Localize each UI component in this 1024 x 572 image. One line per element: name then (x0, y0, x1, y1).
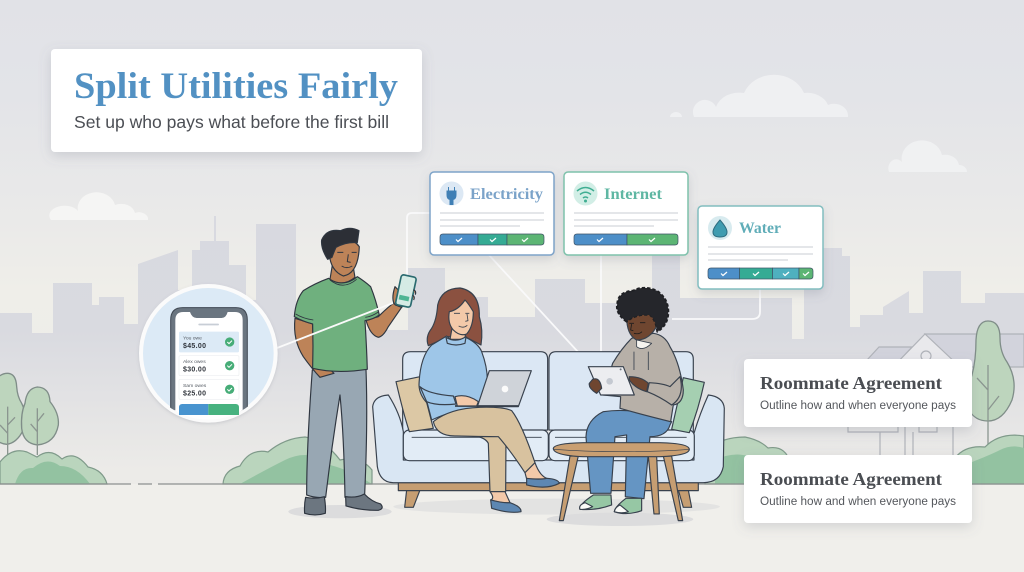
row: you owe (179, 332, 239, 352)
card: roommate agreement 2: Roommate Agreement (760, 469, 942, 489)
hoodie sleeve (647, 377, 681, 405)
internet label: Internet (604, 186, 663, 203)
tablet man hair (617, 288, 668, 332)
woman ankles (490, 463, 548, 503)
shoe soles (580, 503, 628, 513)
woman front leg (433, 407, 535, 473)
bush: right of sofa (705, 437, 790, 484)
callout phone (171, 308, 247, 423)
cloud: right (888, 140, 967, 172)
floor shadows (393, 499, 720, 526)
electricity label: Electricity (470, 186, 543, 203)
woman shoes (491, 478, 559, 512)
hoodie (603, 333, 683, 422)
ground (0, 484, 1024, 572)
cloud: left (49, 192, 148, 220)
sofa and seated people (373, 288, 724, 526)
tree: right (968, 321, 1014, 445)
ground line (0, 483, 1024, 485)
subtitle: Set up who pays what before the first bill (74, 112, 389, 132)
cloud: large (693, 75, 848, 117)
title card panel (51, 49, 422, 152)
tablet man face (629, 323, 645, 334)
bush: middle (223, 437, 372, 484)
row: alex owes (179, 356, 239, 376)
sofa legs (398, 483, 698, 507)
card: electricity (430, 172, 554, 255)
woman sweater (419, 336, 487, 420)
woman face (449, 300, 473, 335)
row: sam owes: $25.00 (183, 390, 206, 397)
card: roommate agreement 1 (744, 359, 972, 427)
trees: left (0, 373, 58, 457)
connector lines (407, 213, 760, 365)
house (848, 334, 1024, 455)
city skyline (0, 216, 1024, 470)
laptop (477, 371, 531, 407)
woman neck (450, 327, 466, 339)
table top (553, 443, 689, 457)
person: man standing with phone (288, 228, 417, 518)
card: roommate agreement 2 (744, 455, 972, 523)
tablet man hands (589, 377, 648, 393)
row: you owe: $45.00 (183, 343, 206, 350)
internet split bar (574, 234, 678, 245)
man hair (322, 228, 359, 259)
title card (51, 49, 422, 152)
bush: far left (0, 451, 107, 484)
woman hand (455, 396, 478, 406)
card: roommate agreement 2: Outline how and when everyone pays (760, 496, 956, 508)
man face (337, 252, 357, 268)
woman hair (427, 288, 482, 346)
phone callout (141, 286, 276, 423)
card: internet (564, 172, 688, 255)
pillows (396, 377, 704, 433)
cloud: small dot (670, 112, 682, 117)
tablet (588, 367, 634, 395)
split bar (179, 404, 239, 415)
tablet man jeans (586, 410, 672, 499)
tablet man head (627, 308, 657, 340)
row: sam owes (179, 379, 239, 399)
man shirt (294, 277, 379, 371)
white line to phone callout (277, 303, 393, 348)
water label: Water (739, 220, 781, 237)
callout circle (141, 286, 276, 421)
card: roommate agreement 1: Roommate Agreement (760, 373, 942, 393)
sofa body (373, 395, 724, 483)
card: water (698, 206, 823, 289)
man jeans (307, 369, 367, 498)
woman sleeve (420, 387, 456, 405)
man with tablet (580, 288, 683, 514)
woman back leg (470, 427, 506, 492)
electricity split bar (440, 234, 544, 245)
coffee table (553, 443, 689, 521)
sofa seat cushions (403, 430, 694, 461)
woman collar (446, 337, 466, 345)
man head (329, 240, 359, 276)
man neck (330, 263, 355, 283)
bush: far right (955, 435, 1024, 484)
icon: plug (440, 182, 464, 206)
man shoes (304, 494, 382, 515)
water split bar (708, 268, 813, 279)
icon: water drop (708, 216, 732, 240)
man shadow (288, 505, 392, 518)
row: sam owes: Sam owes (183, 383, 207, 389)
row: alex owes: $30.00 (183, 367, 206, 374)
woman (419, 288, 559, 512)
row: you owe: You owe (183, 335, 202, 341)
icon: wifi (574, 182, 598, 206)
title: Split Utilities Fairly (74, 66, 399, 107)
row: alex owes: Alex owes (183, 359, 206, 365)
card: roommate agreement 1: Outline how and when everyone pays (760, 400, 956, 412)
sofa back cushions (403, 352, 693, 433)
man left arm (295, 318, 334, 377)
hand and phone (393, 274, 417, 308)
tablet man shoes (580, 495, 642, 514)
table legs (559, 456, 683, 521)
man right arm (366, 303, 402, 337)
